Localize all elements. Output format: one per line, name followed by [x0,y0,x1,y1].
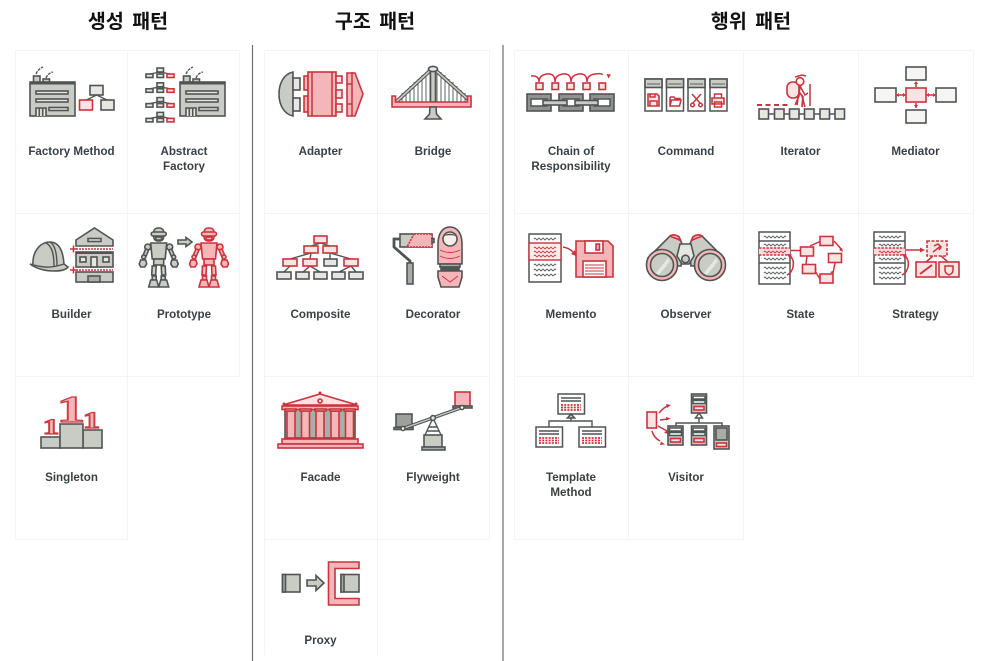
label: State [786,308,815,321]
card: Visitor [628,376,744,540]
icon: factory with class tree [30,67,114,116]
icon: seesaw with two boxes [394,392,472,450]
label: Method [550,486,592,499]
panel: behavioral patterns [514,11,974,540]
label: Bridge [415,145,452,158]
icon: suspension bridge [392,66,471,119]
label: Facade [301,471,341,484]
label: Visitor [668,471,704,484]
icon: document and strategy choices [874,232,959,284]
panel: structural patterns [264,11,490,655]
icon: hiker walking along a chain [757,75,844,119]
icon: podium with number ones [41,389,102,448]
card: Composite [264,214,378,376]
label: Abstract [160,145,208,158]
icon: gray robot cloned to red robot [139,228,228,287]
heading: creational patterns: 생성 패턴 [88,11,168,33]
card: Proxy [264,540,378,655]
icon: document and state machine [759,232,843,284]
card: Iterator [744,50,858,214]
panel: creational patterns [16,11,240,540]
icon: podium with number ones: 1 [57,389,85,431]
card: Memento [514,214,628,376]
card: Mediator [858,50,974,214]
card: State [744,214,858,376]
card: Builder [16,214,128,376]
icon: chain with hops [527,74,614,111]
icon: podium with number ones: 1 [43,415,59,439]
card: Singleton [16,376,128,540]
label: Iterator [781,145,821,158]
icon: visitor and servers [647,394,729,449]
label: Mediator [891,145,940,158]
label: Responsibility [531,160,611,173]
card: Observer [628,214,744,376]
label: Factory [163,160,205,173]
label: Decorator [406,308,461,321]
divider: creational and structural [252,45,254,661]
label: Flyweight [406,471,460,484]
label: Adapter [299,145,343,158]
heading: behavioral patterns: 행위 패턴 [711,11,791,33]
card: Facade [264,376,378,540]
label: Chain of [548,145,594,158]
icon: binoculars [646,235,726,280]
label: Composite [291,308,351,321]
label: Proxy [304,634,337,647]
label: Memento [546,308,596,321]
card: Flyweight [378,376,490,540]
icon: podium with number ones: 1 [83,408,100,433]
icon: proxy box [282,562,359,605]
icon: classical building [278,392,363,448]
label: Template [546,471,597,484]
divider: structural and behavioral [502,45,504,661]
card: Strategy [858,214,974,376]
icon: composite tree [277,236,363,279]
icon: paint roller and nesting doll [394,227,462,287]
card: Template Method [514,376,628,540]
icon: factory with four product trees [146,67,225,122]
label: Prototype [157,308,212,321]
card: Command [628,50,744,214]
icon: document saved to floppy [529,234,613,282]
card: Bridge [378,50,490,214]
card: Decorator [378,214,490,376]
icon: mediator hub [875,67,956,123]
label: Factory Method [28,145,115,158]
label: Observer [661,308,712,321]
label: Builder [52,308,92,321]
icon: adapter plugs [279,72,363,116]
label: Command [658,145,714,158]
card: Factory Method [16,50,128,214]
heading: structural patterns: 구조 패턴 [335,11,415,33]
card: Abstract Factory [128,50,240,214]
label: Strategy [892,308,939,321]
card: Prototype [128,214,240,376]
label: Singleton [45,471,98,484]
icon: four command pages [645,79,727,111]
icon: template hierarchy [536,394,606,447]
card: Chain of Responsibility [514,50,628,214]
card: Adapter [264,50,378,214]
icon: helmet and house parts [30,228,113,282]
